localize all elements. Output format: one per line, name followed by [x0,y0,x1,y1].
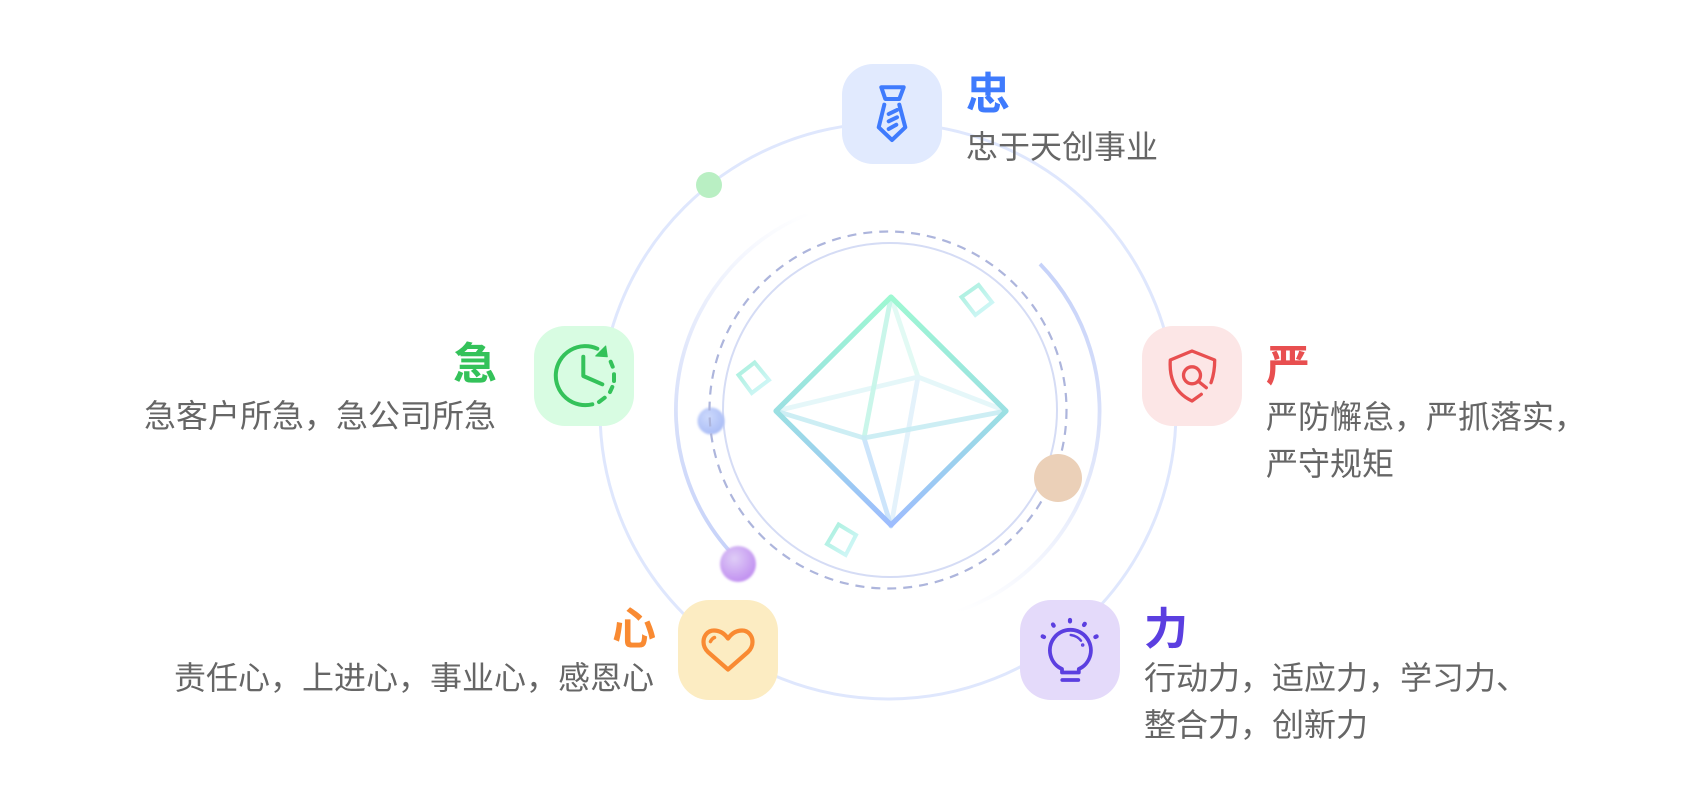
icon: tie [879,87,905,140]
decorative small squares [738,285,992,555]
icon box: heart [678,600,778,700]
icon: heart [704,630,752,670]
crystal diamond [776,297,1006,526]
node: 忠 [842,64,1158,165]
text: 急 description: 急客户所急，急公司所急 [144,398,496,434]
heading: 忠: 忠 [966,70,1010,119]
icon: shield search [1170,351,1215,401]
fading orbit arc left [676,213,810,557]
icon box: tie [842,64,942,164]
text: 严 description: 严防懈怠，严抓落实， [1266,399,1586,435]
node: 急 [144,326,634,434]
text: 心 description: 责任心，上进心，事业心，感恩心 [174,660,654,696]
text: 力 description: 行动力，适应力，学习力、 [1144,660,1528,696]
heading: 急: 急 [453,340,497,389]
icon box: shield [1142,326,1242,426]
node: 严: 严守规矩 [1266,446,1394,482]
outer orbit ring [600,123,1176,699]
node: 心 [174,600,778,700]
icon: clock [556,346,614,405]
text: 忠 description: 忠于天创事业 [966,129,1158,165]
node: 严 [1142,326,1586,482]
icon: light bulb [1043,620,1097,680]
icon box: clock [534,326,634,426]
node: 力: 整合力，创新力 [1144,707,1368,743]
heading: 力: 力 [1144,605,1188,654]
inner ring [723,243,1057,577]
green orbit dot [696,172,722,198]
orange orbit dot [1034,454,1082,502]
dashed ring [710,232,1066,588]
fading orbit arc right [956,264,1100,612]
blue orbit dot [698,408,724,434]
icon box: bulb [1020,600,1120,700]
heading: 严: 严 [1266,342,1310,391]
node: 力 [1020,600,1528,743]
purple orbit dot [720,546,756,582]
heading: 心: 心 [612,605,656,654]
